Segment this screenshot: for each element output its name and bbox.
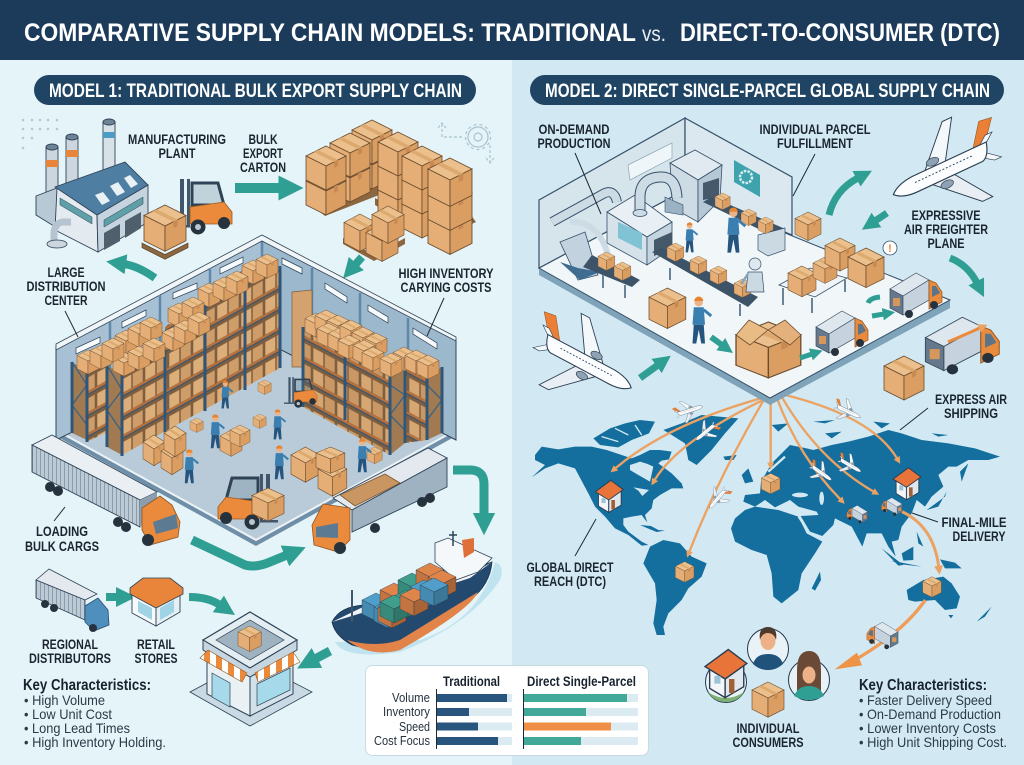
map: Europe, Africa, Asia and Oceania	[731, 420, 1000, 622]
label: retail stores: RETAIL	[137, 637, 175, 652]
map: orange delivery routes	[615, 395, 939, 669]
label: on-demand production: ON-DEMAND	[538, 122, 610, 137]
text block: key characteristics model 2: • Lower Inventory Costs	[859, 720, 996, 736]
labels: model 1	[25, 132, 494, 666]
label: large distribution center	[26, 265, 106, 337]
text block: key characteristics model 2: Key Characteristics:	[859, 677, 987, 694]
text block: key characteristics model 2: • Faster Delivery Speed	[859, 692, 992, 708]
map: destination markers	[595, 468, 941, 649]
icon: warning marker	[883, 241, 897, 255]
label: individual parcel fulfillment: INDIVIDUAL PARCEL	[760, 122, 870, 137]
label: express air shipping: SHIPPING	[944, 406, 998, 421]
delivery vans on platform	[816, 273, 942, 356]
label: express air shipping	[900, 392, 1007, 430]
platform walls	[539, 118, 792, 268]
text block: key characteristics model 2	[859, 677, 1007, 750]
label: loading bulk cargo: LOADING	[36, 524, 88, 539]
icon: loaded truck right	[312, 448, 447, 554]
label: bulk export carton: EXPORT	[243, 146, 284, 161]
label: large distribution center: DISTRIBUTION	[26, 279, 106, 294]
label: individual parcel fulfillment: FULFILLMENT	[777, 136, 854, 151]
icon: consumer house	[705, 650, 747, 702]
illustration: distribution center	[56, 235, 456, 546]
text block: key characteristics model 1: • High Volume	[24, 692, 105, 708]
warehouse floor	[56, 330, 456, 546]
label: final-mile delivery: FINAL-MILE	[942, 515, 1006, 530]
label: retail stores	[134, 637, 178, 666]
label: loading bulk cargo	[25, 507, 99, 554]
icon: faint gear diagram	[438, 123, 494, 163]
chart headers	[443, 674, 636, 689]
icon: loose carton	[884, 356, 924, 400]
label: global direct reach: GLOBAL DIRECT	[526, 560, 614, 575]
arrow: small truck to shop	[106, 593, 118, 601]
label: high inventory carrying costs: HIGH INVENTORY	[398, 266, 494, 281]
chart row labels: Speed	[399, 719, 430, 734]
label: express air shipping: EXPRESS AIR	[935, 392, 1007, 407]
title banner: vs.	[642, 23, 666, 46]
label: manufacturing plant: MANUFACTURING	[128, 132, 226, 147]
label: individual parcel fulfillment	[760, 122, 870, 196]
label: manufacturing plant	[128, 132, 226, 161]
title banner: COMPARATIVE SUPPLY CHAIN MODELS: TRADITIONAL	[24, 19, 636, 47]
icon: bulk export cartons	[305, 120, 476, 261]
icon: consumer parcel	[752, 682, 784, 717]
label: bulk export carton	[240, 132, 286, 175]
label: large distribution center: LARGE	[48, 265, 84, 280]
label: high inventory carrying costs	[398, 266, 494, 336]
production machines and ducts	[552, 150, 785, 316]
text block: key characteristics model 1: Key Characteristics:	[23, 677, 151, 694]
icon: express van	[925, 317, 999, 374]
map: Americas	[532, 415, 738, 635]
label: on-demand production	[538, 122, 610, 214]
label: large distribution center: CENTER	[44, 293, 88, 308]
arrow: plane to van	[950, 258, 977, 283]
arrow: van to van	[872, 314, 884, 316]
label: final-mile delivery	[912, 513, 1006, 544]
label: regional distributors: DISTRIBUTORS	[29, 651, 111, 666]
label: bulk export carton: CARTON	[240, 160, 286, 175]
floor pallets, workers and forklift	[143, 377, 382, 530]
icon: decorative dots	[22, 119, 58, 149]
label: retail stores: STORES	[134, 651, 178, 666]
heading: model 2 pill	[530, 75, 1004, 105]
right storage racks	[292, 290, 442, 455]
label: individual consumers	[732, 721, 804, 750]
icon: freighter plane top	[874, 102, 1022, 234]
chart row labels: Cost Focus	[374, 733, 430, 748]
parcels on the floor	[649, 288, 801, 378]
label: loading bulk cargo: BULK CARGS	[25, 539, 99, 554]
label: individual consumers: INDIVIDUAL	[736, 721, 800, 736]
label: regional distributors: REGIONAL	[42, 637, 98, 652]
arrow: return van	[868, 297, 880, 303]
arrow: truck to ship	[453, 470, 484, 515]
label: manufacturing plant: PLANT	[158, 146, 196, 161]
label: individual consumers: CONSUMERS	[732, 735, 804, 750]
table with parcels	[779, 212, 884, 313]
label: expressive air freighter plane: EXPRESSIVE	[912, 208, 980, 223]
chart row labels: Inventory	[383, 704, 430, 719]
icon: retail store with parcel	[190, 612, 312, 726]
arrow: cartons to warehouse	[355, 257, 362, 265]
bars: direct single-parcel	[524, 689, 638, 749]
arrow: open box to van	[800, 354, 812, 358]
heading: model 1 pill: MODEL 1: TRADITIONAL BULK EXPORT SUPPLY CHAIN	[49, 81, 462, 102]
label: high inventory carrying costs: CARYING COSTS	[400, 280, 492, 295]
platform floor	[539, 190, 950, 405]
arrow: worker to open box	[711, 337, 722, 345]
label: expressive air freighter plane: AIR FREIGHTER	[904, 222, 988, 237]
arrow: platform to plane	[829, 178, 858, 215]
label: on-demand production: PRODUCTION	[538, 136, 610, 151]
text block: key characteristics model 2: • On-Demand Production	[859, 706, 1001, 722]
chart headers: Direct Single-Parcel	[527, 674, 636, 689]
chart headers: Traditional	[443, 674, 500, 689]
label: regional distributors	[29, 637, 111, 666]
icon: retail shop	[130, 578, 183, 626]
heading: model 1 pill	[34, 75, 476, 105]
icon: consumer woman	[788, 651, 830, 700]
title banner	[0, 0, 1024, 60]
icon: consumer man	[748, 627, 788, 670]
icon: container ship	[332, 531, 502, 654]
chart: comparison bars	[366, 666, 648, 756]
arrow: warehouse to plant	[124, 264, 155, 278]
text block: key characteristics model 2: • High Unit Shipping Cost.	[859, 734, 1007, 750]
map: small route planes	[671, 395, 866, 515]
icon: regional distributor truck	[36, 569, 109, 632]
icon: freighter plane left	[513, 298, 651, 424]
label: expressive air freighter plane: PLANE	[928, 236, 964, 251]
bars: traditional	[436, 689, 512, 749]
chart row labels	[374, 690, 430, 748]
left storage racks	[72, 254, 280, 456]
arrow: ship to store	[315, 651, 330, 659]
map overlay: routes and markers	[595, 395, 941, 669]
label: global direct reach: REACH (DTC)	[534, 574, 606, 589]
text block: key characteristics model 1: • High Inventory Holding.	[24, 734, 166, 750]
arrow: shop to store	[189, 597, 220, 605]
labels: model 2	[526, 122, 1007, 750]
text block: key characteristics model 1: • Long Lead Times	[24, 720, 130, 736]
label: final-mile delivery: DELIVERY	[952, 529, 1006, 544]
label: expressive air freighter plane	[904, 208, 988, 251]
text block: key characteristics model 1	[23, 677, 166, 750]
illustration: parcel fulfilment platform	[539, 118, 950, 405]
parcels on conveyors	[598, 193, 773, 297]
right panel background	[512, 60, 1024, 765]
label: bulk export carton: BULK	[248, 132, 278, 147]
icon: warning marker: !	[888, 243, 892, 255]
arrow: left plane to platform	[640, 365, 658, 378]
chart row labels: Volume	[392, 690, 430, 705]
arrow: plane to platform	[875, 213, 887, 221]
icon: manufacturing plant	[36, 119, 148, 252]
text block: key characteristics model 1: • Low Unit Cost	[24, 706, 112, 722]
left panel background	[0, 60, 512, 765]
icon: pallet and forklift	[142, 179, 232, 259]
workers and robot	[686, 207, 764, 344]
icon: bulk truck left	[32, 435, 180, 546]
arrow: plant to cartons	[235, 183, 281, 193]
label: global direct reach	[526, 519, 614, 589]
warehouse walls	[56, 235, 456, 440]
arrow: truck to truck	[192, 540, 287, 566]
